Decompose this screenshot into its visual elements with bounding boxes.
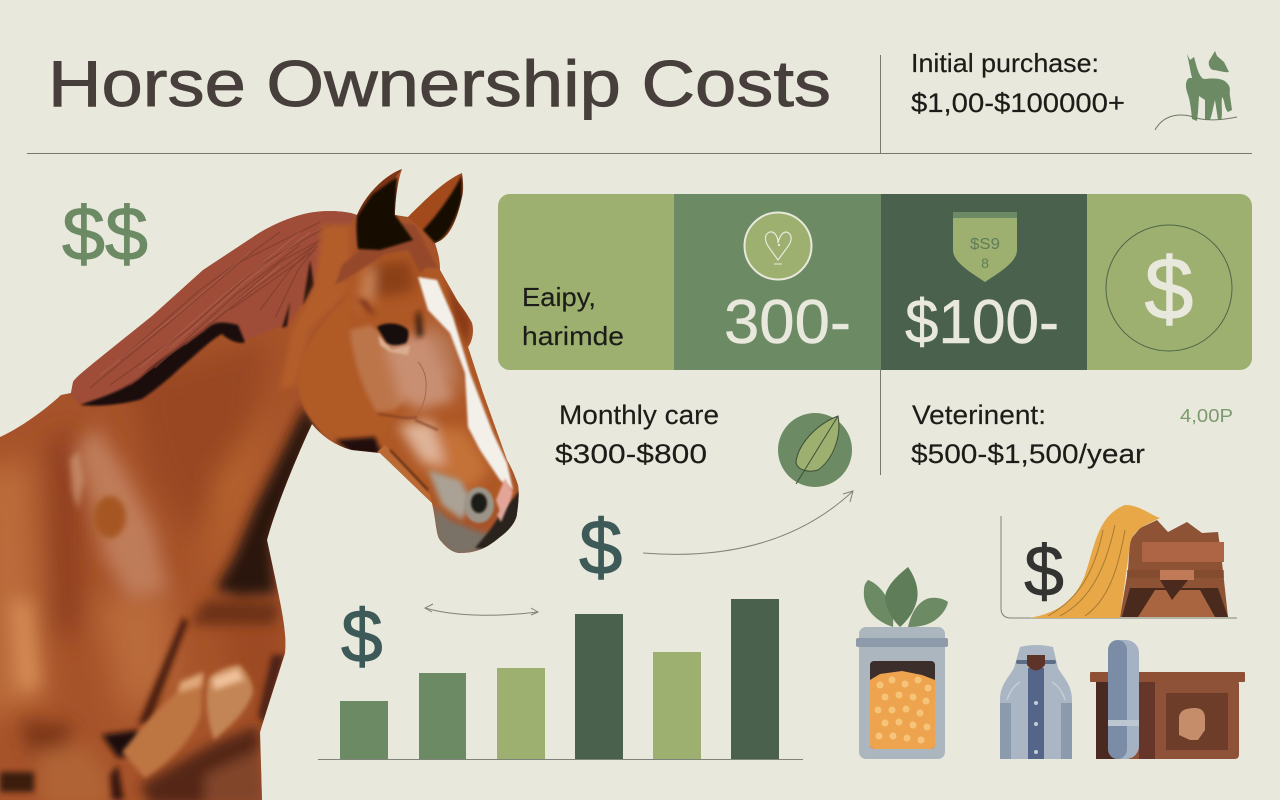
text: initial purchase	[911, 48, 1125, 118]
small label: 4,00P	[1180, 406, 1233, 426]
icon: shield badge	[953, 212, 1017, 282]
banner segment: label	[498, 194, 674, 370]
eye	[378, 335, 410, 355]
text: monthly care	[555, 400, 719, 469]
white blaze	[418, 277, 513, 490]
icon: large dollar coin	[1106, 225, 1232, 351]
banner label text: Eaipy,	[522, 282, 596, 312]
neck shadow	[190, 405, 318, 625]
trough	[1120, 520, 1228, 617]
dollar above chart left: $	[341, 594, 383, 678]
icon: brown box with blue cylinder	[1090, 640, 1245, 759]
face shading	[360, 260, 490, 490]
text: veterinary: $500-$1,500/year	[911, 439, 1145, 469]
banner label text: harimde	[522, 321, 624, 351]
divider below banner	[880, 370, 882, 475]
curved arrow to leaf	[643, 491, 853, 554]
icon: blue vest	[1000, 645, 1072, 759]
text: veterinary: Veterinent:	[912, 400, 1046, 430]
icon: shield badge: $S9	[970, 236, 1000, 253]
icon: leaf	[778, 413, 852, 487]
header dividers	[27, 55, 1252, 154]
dollar sign: $	[1024, 532, 1064, 612]
cheek plate	[350, 325, 412, 412]
mane	[70, 209, 360, 405]
crest and head base	[280, 225, 350, 390]
icon: double dollar signs: $$	[62, 192, 148, 277]
hay	[1030, 505, 1160, 618]
icon: heart stethoscope	[744, 212, 812, 280]
text: initial purchase: Initial purchase:	[911, 48, 1099, 78]
title: Horse Ownership Costs	[48, 47, 831, 120]
icon: large dollar coin: $	[1145, 239, 1193, 338]
icon: green horse silhouette	[1155, 51, 1237, 130]
panel: cost banner	[498, 194, 1252, 370]
chest lumps	[122, 665, 253, 778]
text: monthly care: Monthly care	[559, 400, 719, 430]
banner figure 100: $100-	[905, 288, 1059, 357]
forelock	[335, 222, 438, 285]
bar chart	[318, 599, 803, 760]
panel: hay and trough	[1001, 505, 1237, 618]
double-headed arrow	[425, 604, 538, 615]
banner figure 300: 300-	[724, 288, 851, 357]
icon: feed jar with leaves	[856, 567, 948, 759]
dollar above chart right: $	[579, 503, 622, 591]
nose and muzzle	[432, 505, 500, 556]
ears	[357, 169, 402, 225]
cheek	[300, 306, 364, 440]
banner segment: dollar	[1087, 194, 1252, 370]
icon: shield badge: 8	[981, 255, 989, 271]
jaw shadow	[335, 437, 382, 455]
banner segment: medium green	[674, 194, 881, 370]
text: monthly care: $300-$800	[555, 439, 707, 469]
banner segment: dark green	[881, 194, 1087, 370]
text: veterinary	[911, 400, 1145, 469]
banner label text	[522, 282, 624, 351]
horse illustration	[0, 160, 530, 800]
text: initial purchase: $1,00-$100000+	[911, 88, 1125, 118]
